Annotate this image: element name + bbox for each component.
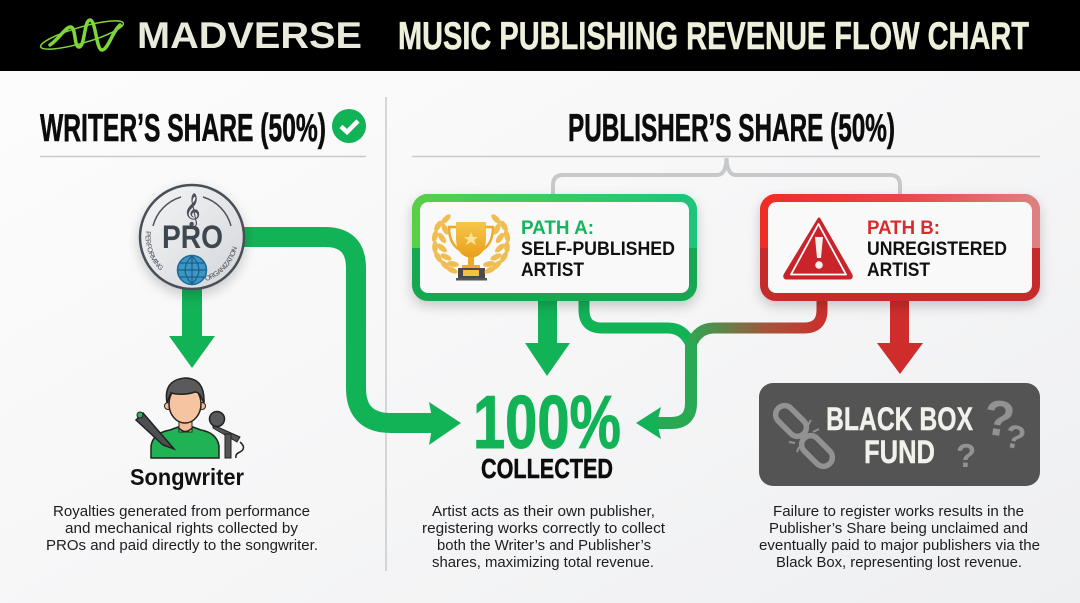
path A description: shares, maximizing total revenue. [432,554,654,571]
path B label: UNREGISTERED [867,238,1007,260]
icon: PRO badge: PERFORMING [146,232,163,270]
icon: Madverse logo [38,15,126,55]
black box fund [759,383,1040,486]
path B label: ARTIST [867,259,930,281]
panel: writer's share [40,107,461,554]
writer's share description: and mechanical rights collected by [65,520,299,537]
path B description: Failure to register works results in the [773,503,1024,520]
path B description: Black Box, representing lost revenue. [776,554,1022,571]
card: path B [764,198,1036,297]
icon: songwriter [136,378,244,458]
path B description [759,503,1040,571]
logo wordmark: MADVERSE [137,15,362,56]
right laurel [483,213,511,275]
path A label [521,217,675,281]
icons: question marks: ? [956,437,976,474]
path A label: PATH A: [521,217,594,239]
icon: check mark [332,109,366,143]
path A label: SELF-PUBLISHED [521,238,675,260]
path B description: eventually paid to major publishers via the [759,537,1040,554]
icon: broken chain [772,402,836,470]
black box label [826,401,974,470]
path A label: ARTIST [521,259,584,281]
arrow: PRO to 100% collected [240,237,461,445]
writer's share description: PROs and paid directly to the songwriter. [46,537,318,554]
100% collected stat: 100% [473,380,621,464]
header bar [0,0,1080,71]
icon: trophy [431,213,511,280]
path B label [867,217,1007,281]
100% collected stat [473,380,621,484]
icon: PRO badge [134,184,250,300]
icon: warning triangle [785,219,851,278]
black box label: BLACK BOX [826,401,974,437]
icon: PRO badge: PRO [162,219,223,255]
icons: question marks: ? [1001,416,1029,457]
icons: question marks [956,389,1029,474]
writer's share description: Royalties generated from performance [53,503,310,520]
path B description: Publisher’s Share being unclaimed and [769,520,1028,537]
path A description: both the Writer’s and Publisher’s [437,537,651,554]
icon: PRO badge: 𝄞 [184,193,200,227]
bracket connector [553,158,900,196]
icon: PRO badge: ORGANIZATION [205,246,237,280]
writer's share description [46,503,318,554]
heading: writer's share: WRITER’S SHARE (50%) [40,107,326,150]
card: path A [416,198,693,297]
heading: publisher's share: PUBLISHER’S SHARE (50%) [568,107,895,150]
100% collected stat: COLLECTED [481,453,613,484]
connector: path A and B merging to 100% [584,298,822,439]
path A description [422,503,666,571]
path A description: registering works correctly to collect [422,520,666,537]
path B label: PATH B: [867,217,940,239]
arrow: PRO to songwriter [169,285,215,368]
arrow: path A to 100% [525,298,570,376]
black box label: FUND [864,434,935,470]
arrow: path B to black box [877,298,923,374]
left laurel [431,213,459,275]
songwriter label: Songwriter [130,464,244,490]
path A description: Artist acts as their own publisher, [432,503,655,520]
panel: publisher's share [412,107,1040,571]
icons: question marks: ? [980,389,1018,448]
